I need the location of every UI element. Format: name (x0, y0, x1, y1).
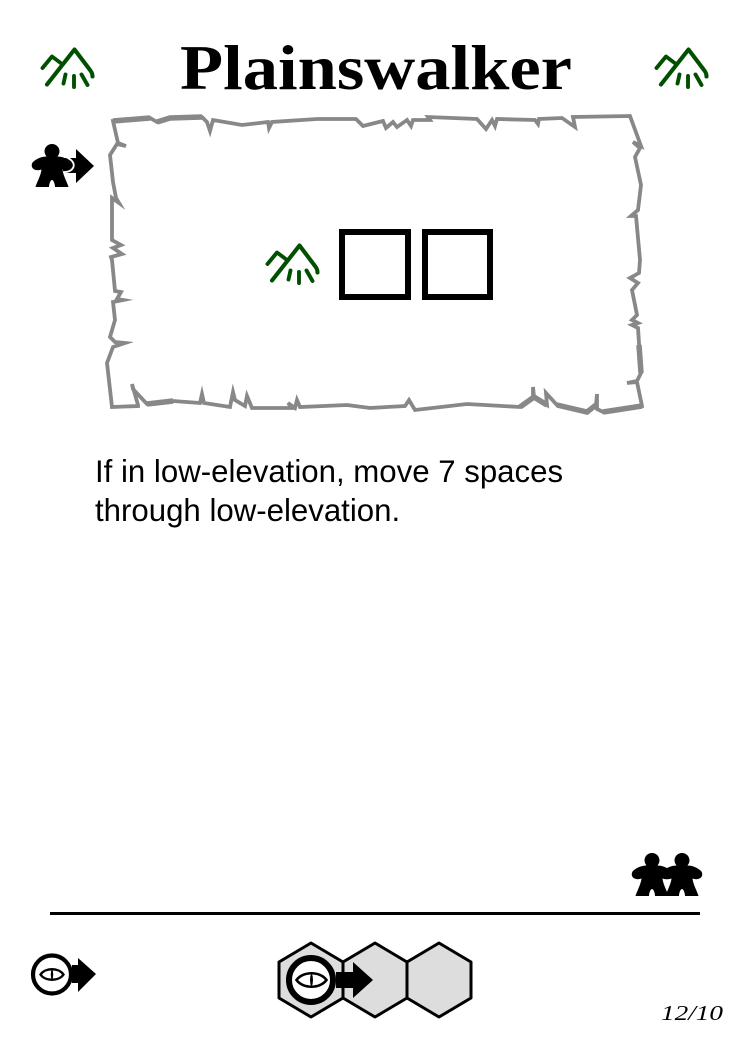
icon: two meeples (632, 853, 702, 896)
hex 3 (407, 943, 471, 1017)
icon: low-elevation mountain, top left (42, 50, 92, 87)
rules text: through low-elevation. (95, 493, 400, 528)
icon: mountain cost symbol (268, 246, 318, 283)
action box 2 (425, 232, 490, 297)
eye (296, 972, 326, 988)
icon: vision arrow (33, 956, 96, 994)
range arrow (336, 962, 373, 998)
card number: 12/10 (661, 1001, 724, 1025)
title: Plainswalker (180, 32, 572, 103)
divider (50, 912, 700, 915)
icon: low-elevation mountain, top right (656, 50, 706, 87)
diagram: hex range (279, 943, 471, 1017)
panel: torn parchment frame (107, 116, 642, 412)
rules text: If in low-elevation, move 7 spaces (95, 454, 563, 489)
vision circle (289, 958, 333, 1002)
icon: meeple move (32, 144, 94, 187)
action box 1 (342, 232, 408, 297)
hex 1 (279, 943, 343, 1017)
hex 2 (343, 943, 407, 1017)
